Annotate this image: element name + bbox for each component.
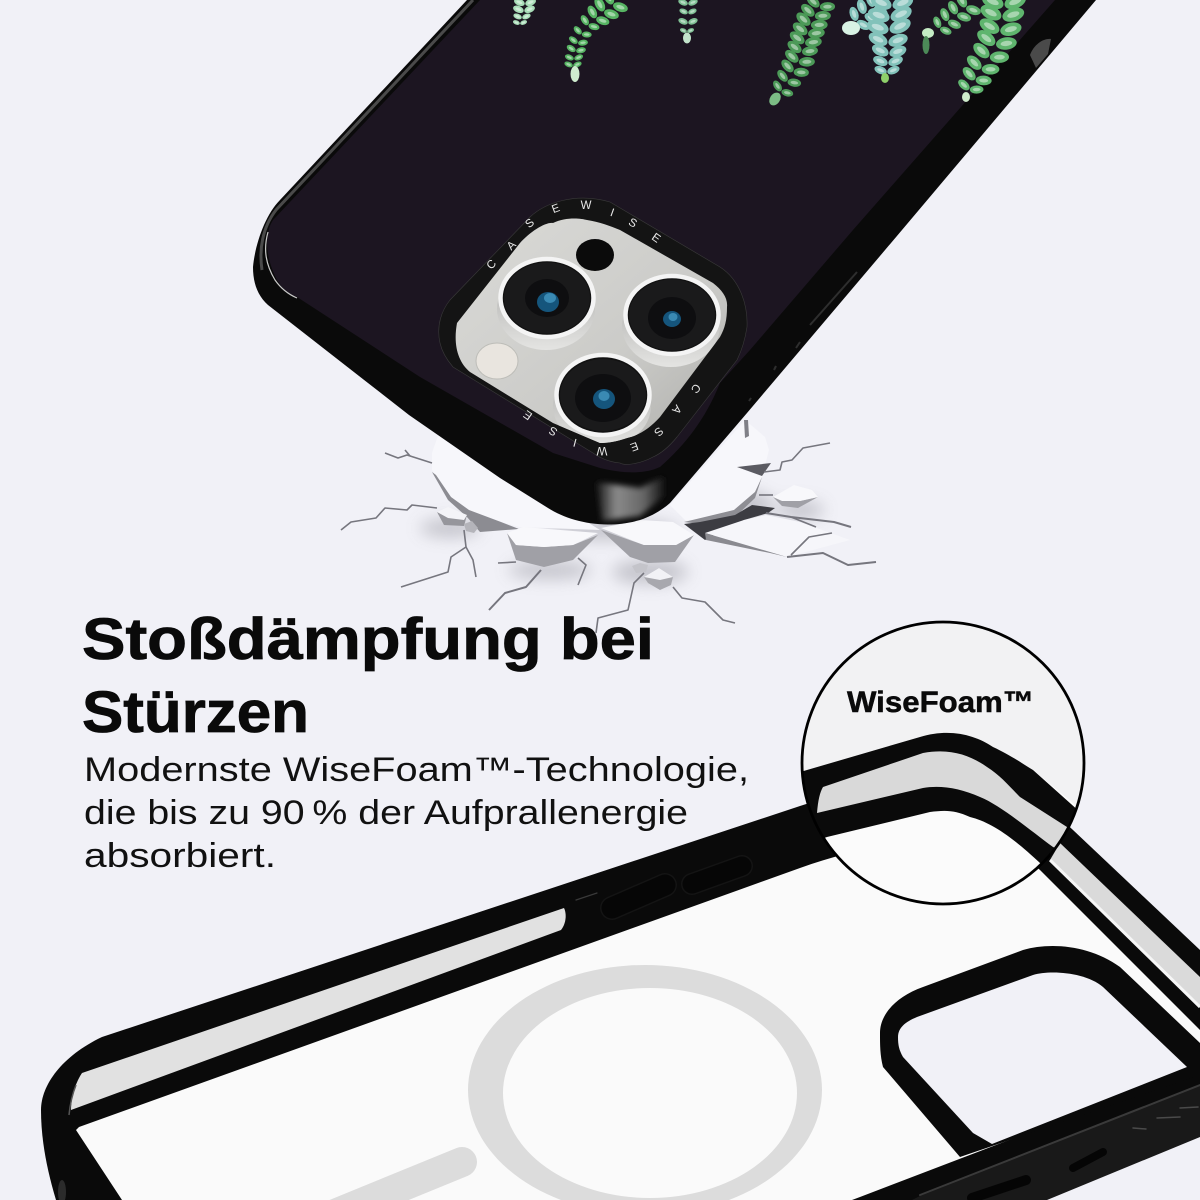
- island black bezel: [439, 198, 747, 464]
- bezel text: casewise: C: [688, 381, 703, 395]
- white line right: [1050, 860, 1200, 1007]
- heading: Stürzen: [82, 680, 309, 745]
- magnifier callout: WiseFoam: [800, 620, 1086, 906]
- corner white line: [266, 232, 297, 298]
- corner port: [58, 1180, 66, 1200]
- left foam strip: [71, 908, 566, 1110]
- flash: [476, 343, 518, 379]
- right foam strip: [1050, 843, 1200, 1007]
- magnet ring: [468, 965, 822, 1200]
- bezel text: casewise: E: [649, 231, 663, 246]
- bezel text: casewise: S: [547, 423, 560, 438]
- rock C: [601, 520, 694, 563]
- phone case outer shell: [253, 0, 1096, 524]
- top phone in case: [253, 0, 1096, 524]
- clear back window: [76, 841, 1200, 1200]
- corner highlight: [69, 1085, 76, 1115]
- body text: absorbiert.: [84, 837, 276, 875]
- lens barrels: [497, 300, 720, 443]
- bezel text: casewise: E: [521, 407, 535, 422]
- side button top right: [1030, 39, 1051, 68]
- bezel text: casewise: I: [572, 436, 578, 448]
- bezel text: casewise: [485, 200, 703, 456]
- magnified case corner: [804, 732, 1076, 867]
- rock A: [437, 507, 478, 533]
- bezel text: casewise: A: [505, 239, 519, 253]
- camera cutout frame: [880, 946, 1200, 1157]
- camera cutout opening: [898, 973, 1187, 1144]
- lens 3: [556, 355, 650, 435]
- bottom edge band: [912, 1086, 1200, 1200]
- bezel text: casewise: A: [669, 402, 683, 416]
- right side button details: [749, 272, 857, 401]
- bezel text: casewise: S: [626, 216, 639, 231]
- side buttons: [576, 866, 742, 908]
- magnet pill: [330, 1162, 462, 1200]
- left edge highlight: [261, 0, 473, 270]
- bezel text: casewise: W: [596, 444, 607, 456]
- bezel text: casewise: S: [651, 424, 665, 438]
- small rocks: [632, 563, 673, 590]
- bezel text: casewise: E: [550, 202, 562, 216]
- body text: Modernste WiseFoam™-Technologie,: [84, 751, 749, 789]
- camera island: [439, 198, 747, 464]
- clear case photo: [41, 779, 1200, 1200]
- lens 1: [500, 259, 594, 337]
- body text: [84, 751, 749, 875]
- fern leaves: [512, 0, 1028, 108]
- silver corner highlight: [596, 476, 664, 521]
- heading: [82, 607, 654, 745]
- magnifier ring: [802, 622, 1084, 904]
- port details: [920, 1085, 1200, 1198]
- lens 2: [626, 276, 718, 354]
- bezel text: casewise: S: [523, 216, 537, 231]
- rock B: [507, 527, 598, 567]
- body text: die bis zu 90 % der Aufprallenergie: [84, 794, 688, 832]
- bezel text: casewise: I: [608, 207, 616, 219]
- camera plate and lenses: [456, 218, 728, 443]
- heading: Stoßdämpfung bei: [82, 607, 654, 672]
- case black frame: [41, 779, 1200, 1200]
- cracked ground illustration: [341, 420, 876, 633]
- rock right: [773, 485, 818, 508]
- bezel text: casewise: E: [628, 439, 640, 453]
- phone back surface: [267, 0, 1055, 472]
- background below case: [1047, 1137, 1200, 1200]
- bezel text: casewise: C: [485, 258, 499, 272]
- callout label: WiseFoam™: [847, 686, 1034, 719]
- bezel text: casewise: W: [581, 200, 592, 212]
- lens hole: [576, 239, 614, 271]
